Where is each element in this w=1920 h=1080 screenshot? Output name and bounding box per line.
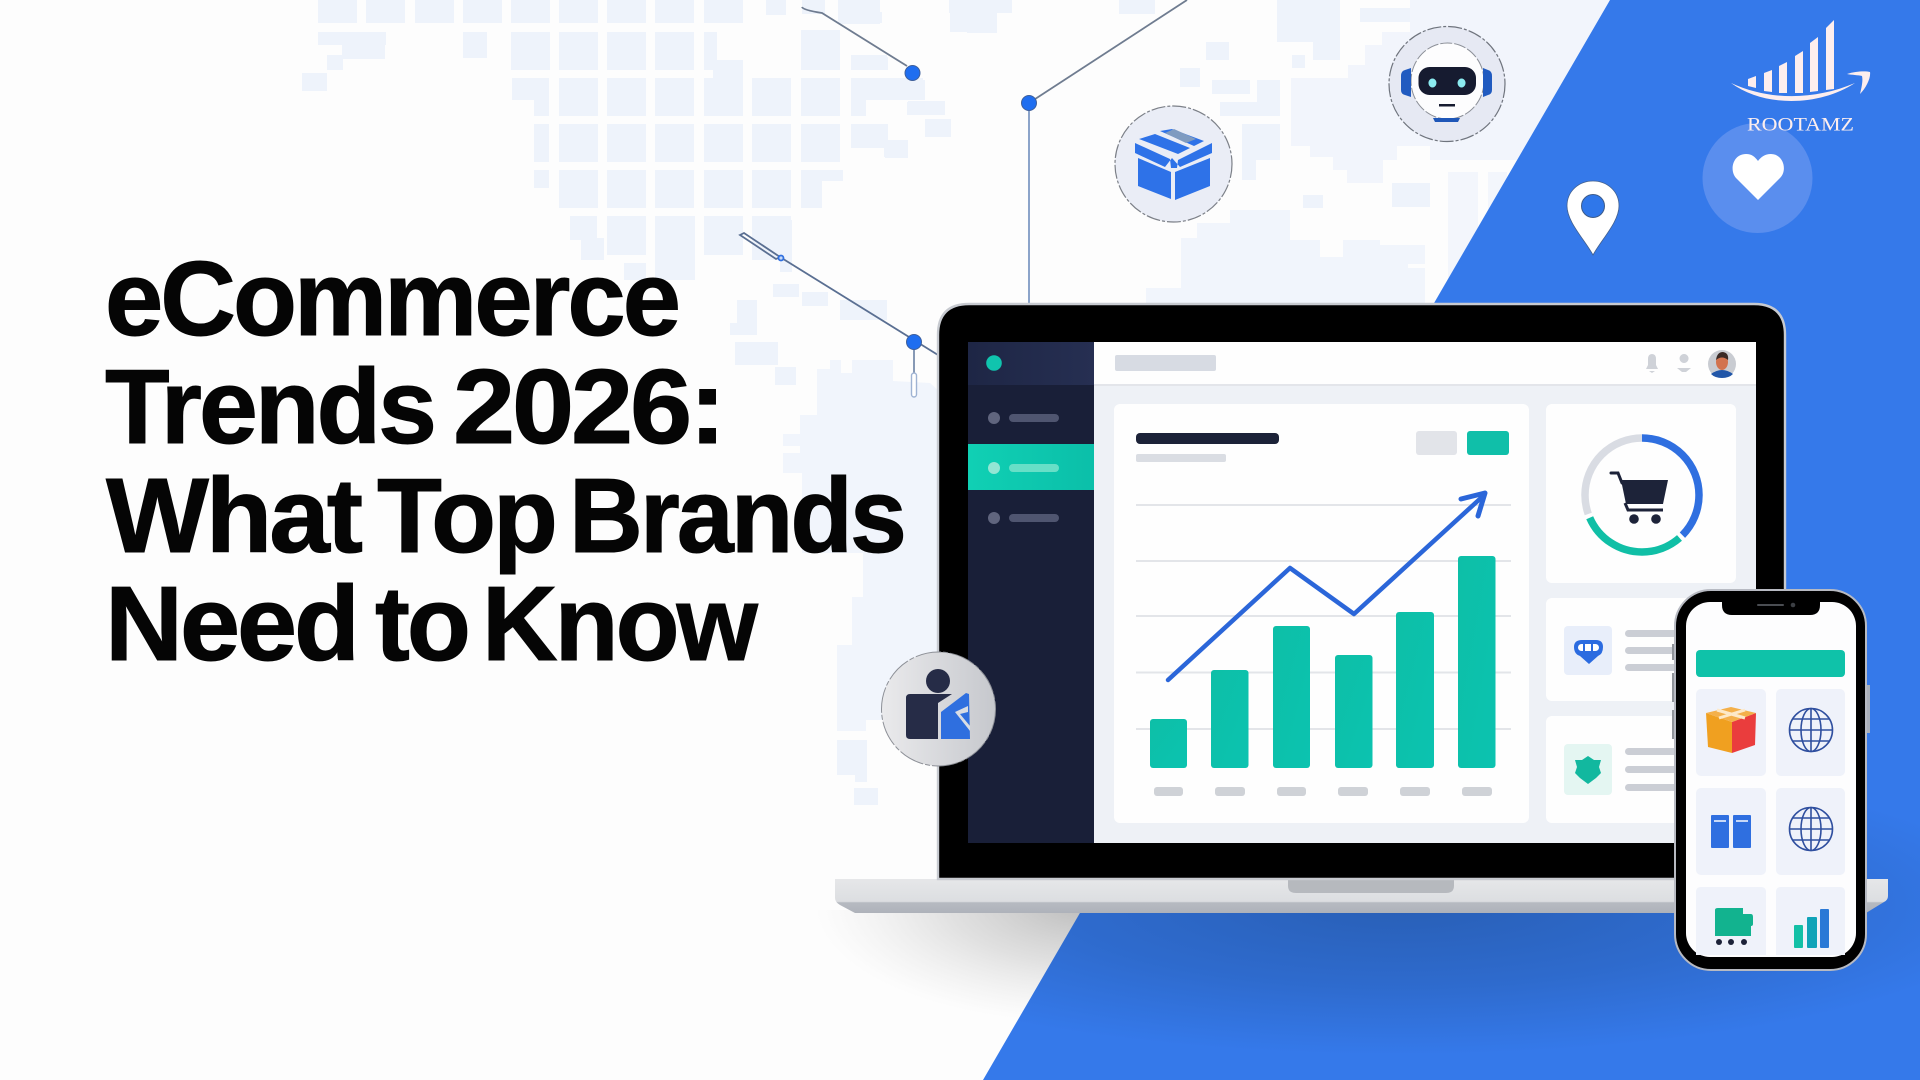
menu item 1 [988, 412, 1059, 424]
title line 2: Trends [105, 348, 434, 466]
list card 1 [1546, 598, 1736, 701]
laptop notch [1288, 879, 1454, 893]
title line 2 [105, 348, 723, 466]
active menu band [968, 444, 1094, 490]
connector lower left [740, 233, 938, 355]
person head [926, 669, 950, 693]
laptop shadow on white area [866, 913, 1080, 998]
list card 2 [1546, 716, 1736, 823]
robot head [1411, 43, 1484, 119]
robot face [1418, 67, 1476, 95]
title line 4: Know [482, 565, 759, 683]
title line 2: 2026: [453, 348, 723, 466]
icon: chat robot [1574, 640, 1603, 664]
title line 3: Brands [569, 457, 904, 575]
robot ears [1401, 68, 1492, 97]
laptop base [835, 879, 1888, 913]
title line 3: What [106, 457, 362, 575]
card subtitle [1136, 454, 1226, 462]
connector top left [802, 7, 907, 66]
logo wordmark: ROOTAMZ [1747, 114, 1854, 136]
laptop [835, 304, 1888, 913]
connector lines and nodes [740, 0, 1187, 397]
title [105, 240, 904, 683]
laptop lid [938, 304, 1785, 879]
stem pill [912, 373, 916, 397]
person body [906, 694, 952, 739]
box front [1138, 158, 1210, 200]
heart [1733, 154, 1784, 200]
camera [1791, 603, 1795, 607]
node stem [913, 342, 915, 373]
icon: person with package [882, 652, 996, 766]
logo swoosh [1731, 71, 1870, 101]
icon: cart [1611, 473, 1668, 524]
box flaps [1135, 129, 1212, 168]
blue package [941, 693, 970, 739]
card title [1136, 433, 1279, 444]
axis labels [1154, 787, 1492, 796]
sidebar header [968, 342, 1094, 385]
icon: globe 1 [1790, 708, 1832, 752]
text lines [1625, 630, 1680, 671]
donut card [1546, 404, 1736, 583]
status dot [986, 355, 1002, 371]
icon tile [1564, 744, 1612, 795]
tiles [1696, 689, 1845, 955]
icon: wallet cart [1715, 908, 1753, 945]
phone body [1675, 590, 1866, 970]
donut chart [1585, 438, 1699, 552]
icon: globe 2 [1790, 808, 1832, 850]
icon: mini bars [1794, 909, 1829, 948]
search placeholder [1115, 355, 1216, 371]
robot mouth [1439, 104, 1455, 106]
node 2 [1022, 96, 1036, 110]
icon: bell [1646, 354, 1658, 373]
menu item 2 [988, 462, 1059, 474]
title line 3: Top [377, 457, 555, 575]
grid lines [1136, 504, 1511, 730]
blue diagonal panel [983, 0, 1920, 1080]
title line 4: to [375, 565, 468, 683]
connector top centre [1029, 0, 1187, 103]
bars [1150, 556, 1496, 768]
teal button [1467, 431, 1509, 455]
robot chin [1433, 118, 1460, 122]
icon: blue panels [1711, 815, 1751, 848]
icon: parcel [1706, 707, 1756, 753]
chart card [1114, 404, 1529, 823]
small ring node [778, 256, 784, 260]
screen background [968, 342, 1756, 843]
icon: user bell [1677, 354, 1691, 372]
icon: robot in circle [1389, 26, 1505, 142]
grey button [1416, 431, 1457, 455]
icon tile [1564, 626, 1612, 675]
speaker [1757, 604, 1784, 606]
world map pixel grid [302, 0, 1610, 805]
logo: Rootamz [1731, 20, 1870, 136]
title line 3 [106, 457, 904, 575]
icon: heart in circle [1702, 123, 1812, 233]
phone screen [1686, 602, 1856, 957]
sidebar [968, 342, 1094, 843]
side buttons [1672, 644, 1870, 739]
icon: teal badge [1575, 756, 1601, 784]
icon: package in circle [1115, 106, 1232, 222]
title line 1: eCommerce [105, 240, 678, 358]
trend arrow [1168, 493, 1485, 680]
phone [1672, 590, 1870, 970]
title line 4: Need [105, 565, 357, 683]
connector vertical [1028, 103, 1030, 303]
top bar [1094, 342, 1756, 386]
laptop shadow on blue area [1030, 840, 1920, 1036]
title line 4 [105, 565, 759, 683]
node 3 [906, 334, 922, 350]
avatar [1708, 350, 1736, 378]
icon: map pin [1567, 181, 1619, 255]
teal banner [1696, 650, 1845, 677]
phone notch [1722, 602, 1820, 615]
pin hole [1582, 194, 1604, 218]
menu item 3 [988, 512, 1059, 524]
logo bars [1748, 20, 1834, 93]
text lines [1625, 748, 1680, 791]
robot eyes [1428, 78, 1466, 87]
node 1 [905, 66, 920, 80]
